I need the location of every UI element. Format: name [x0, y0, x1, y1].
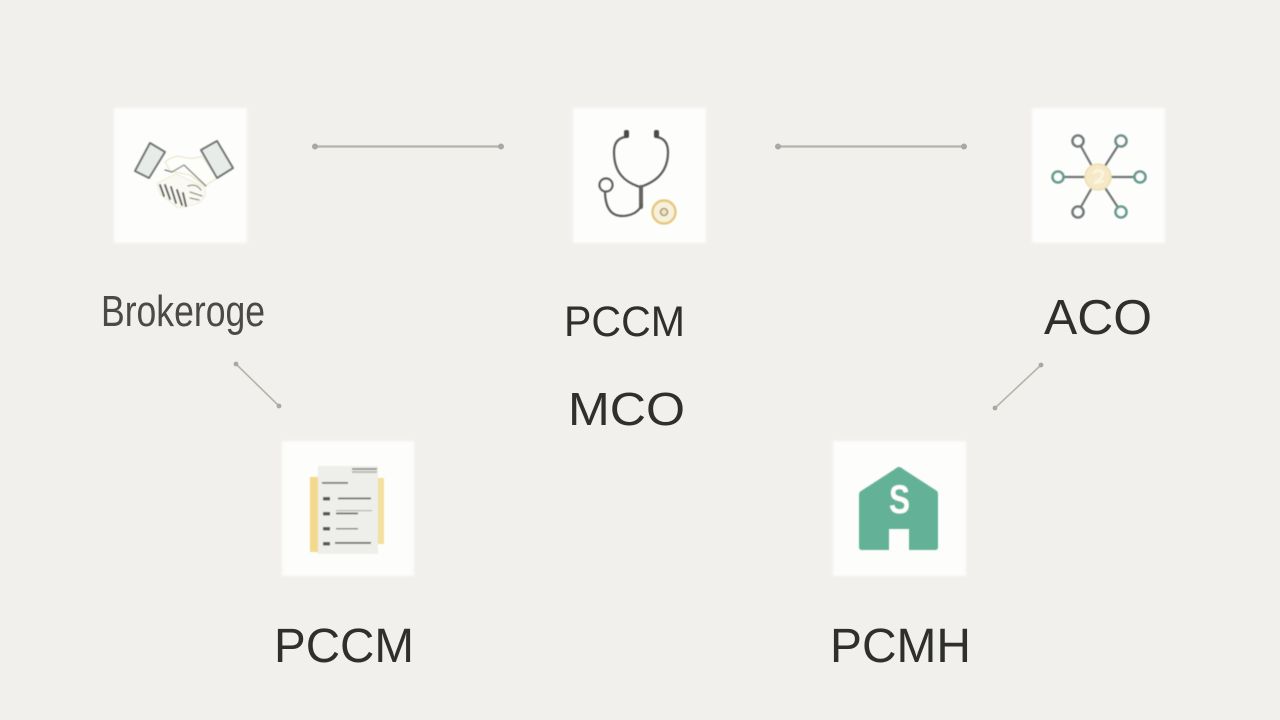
icon card: document — [282, 441, 414, 576]
panel: lower PCCM node — [274, 441, 414, 673]
label: MCO centre: MCO — [568, 383, 685, 435]
arrow: Brokerage to PCCM centre — [312, 144, 504, 150]
icon card: house — [833, 441, 966, 576]
label: Brokeroge: Brokeroge — [101, 288, 265, 336]
arrow: PCCM centre to ACO — [775, 144, 967, 150]
icon: house with dollar sign: S — [889, 478, 910, 522]
icon card: stethoscope — [573, 108, 706, 243]
icon: house with dollar sign — [859, 467, 938, 550]
panel: ACO node — [1032, 108, 1165, 345]
icon: document checklist — [310, 466, 384, 554]
label: PCMH: PCMH — [830, 620, 971, 673]
label: PCCM: PCCM — [564, 298, 685, 346]
label: ACO: ACO — [1044, 291, 1152, 345]
label: PCCM: PCCM — [274, 620, 414, 673]
arrow: PCMH to ACO — [993, 363, 1043, 410]
icon: network hub — [1052, 136, 1146, 218]
panel: PCCM centre node — [564, 108, 706, 346]
icon card: handshake — [114, 108, 247, 243]
arrow: Brokerage to lower PCCM — [234, 362, 281, 408]
panel: PCMH node — [830, 441, 971, 673]
panel: Brokerage node — [101, 108, 265, 336]
icon card: network — [1032, 108, 1165, 243]
icon: handshake — [135, 141, 233, 208]
icon: stethoscope — [600, 130, 676, 224]
